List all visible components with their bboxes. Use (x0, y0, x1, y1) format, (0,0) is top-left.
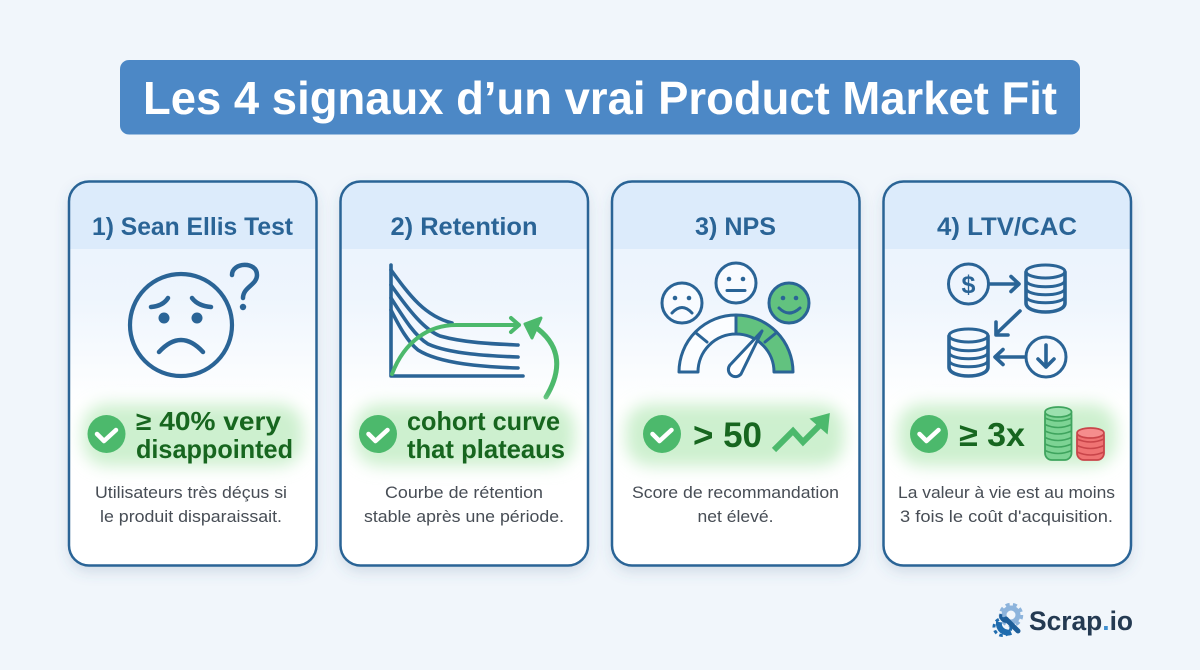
panel: Retention (340, 182, 588, 566)
icon: green coin stack (1045, 407, 1072, 460)
callout: greater than 50: > 50 (693, 416, 762, 455)
chart: retention cohort curves (391, 265, 557, 397)
description (95, 484, 287, 526)
description (632, 484, 839, 526)
panel: LTV/CAC (884, 182, 1131, 566)
down arrow coin (1026, 337, 1066, 377)
description: Courbe de rétention (385, 484, 543, 502)
heading: 3) NPS (695, 213, 776, 241)
callout: 3x or more: ≥ 3x (959, 416, 1026, 453)
description (364, 484, 564, 526)
callout: 40% very disappointed (83, 404, 303, 466)
gauge (679, 315, 793, 377)
description: le produit disparaissait. (100, 508, 282, 526)
description: 3 fois le coût d'acquisition. (900, 508, 1113, 526)
panel: NPS (612, 182, 860, 566)
panel: Sean Ellis Test (69, 182, 316, 566)
description: Utilisateurs très déçus si (95, 484, 287, 502)
description: Score de recommandation (632, 484, 839, 502)
title banner (120, 60, 1080, 134)
icon: sad face with question mark (130, 265, 257, 376)
heading: 2) Retention (390, 213, 538, 241)
description: stable après une période. (364, 508, 564, 526)
callout: cohort curve that plateaus: that plateaus (407, 434, 565, 464)
database top (1026, 265, 1065, 312)
icon: three smileys and gauge (662, 263, 809, 377)
happy smiley (769, 283, 809, 323)
callout: cohort curve that plateaus: cohort curve (407, 406, 560, 436)
sad smiley (662, 283, 702, 323)
icon: red coin stack (1077, 428, 1104, 460)
logo: Scrap.io (994, 604, 1133, 636)
heading: 4) LTV/CAC (937, 213, 1077, 241)
callout: greater than 50 (626, 404, 844, 466)
arrow: pointing at the plateau (525, 318, 557, 397)
description: La valeur à vie est au moins (898, 484, 1115, 502)
neutral smiley (716, 263, 756, 303)
description: net élevé. (698, 508, 774, 526)
wordmark: Scrap.io (1029, 606, 1133, 636)
description (898, 484, 1115, 526)
database bottom (949, 329, 988, 376)
icon: trend arrow (774, 414, 829, 450)
callout: 3x or more (898, 404, 1116, 466)
callout: cohort curve that plateaus (355, 404, 575, 466)
icon: money flow diagram (948, 264, 1066, 377)
callout: 40% very disappointed: disappointed (136, 434, 293, 464)
callout: 40% very disappointed: ≥ 40% very (136, 406, 282, 436)
title text: Les 4 signaux d’un vrai Product Market Fit (143, 72, 1057, 124)
heading: 1) Sean Ellis Test (92, 213, 294, 241)
icon: gear and wrench (994, 604, 1022, 636)
dollar coin: $ (962, 271, 976, 299)
